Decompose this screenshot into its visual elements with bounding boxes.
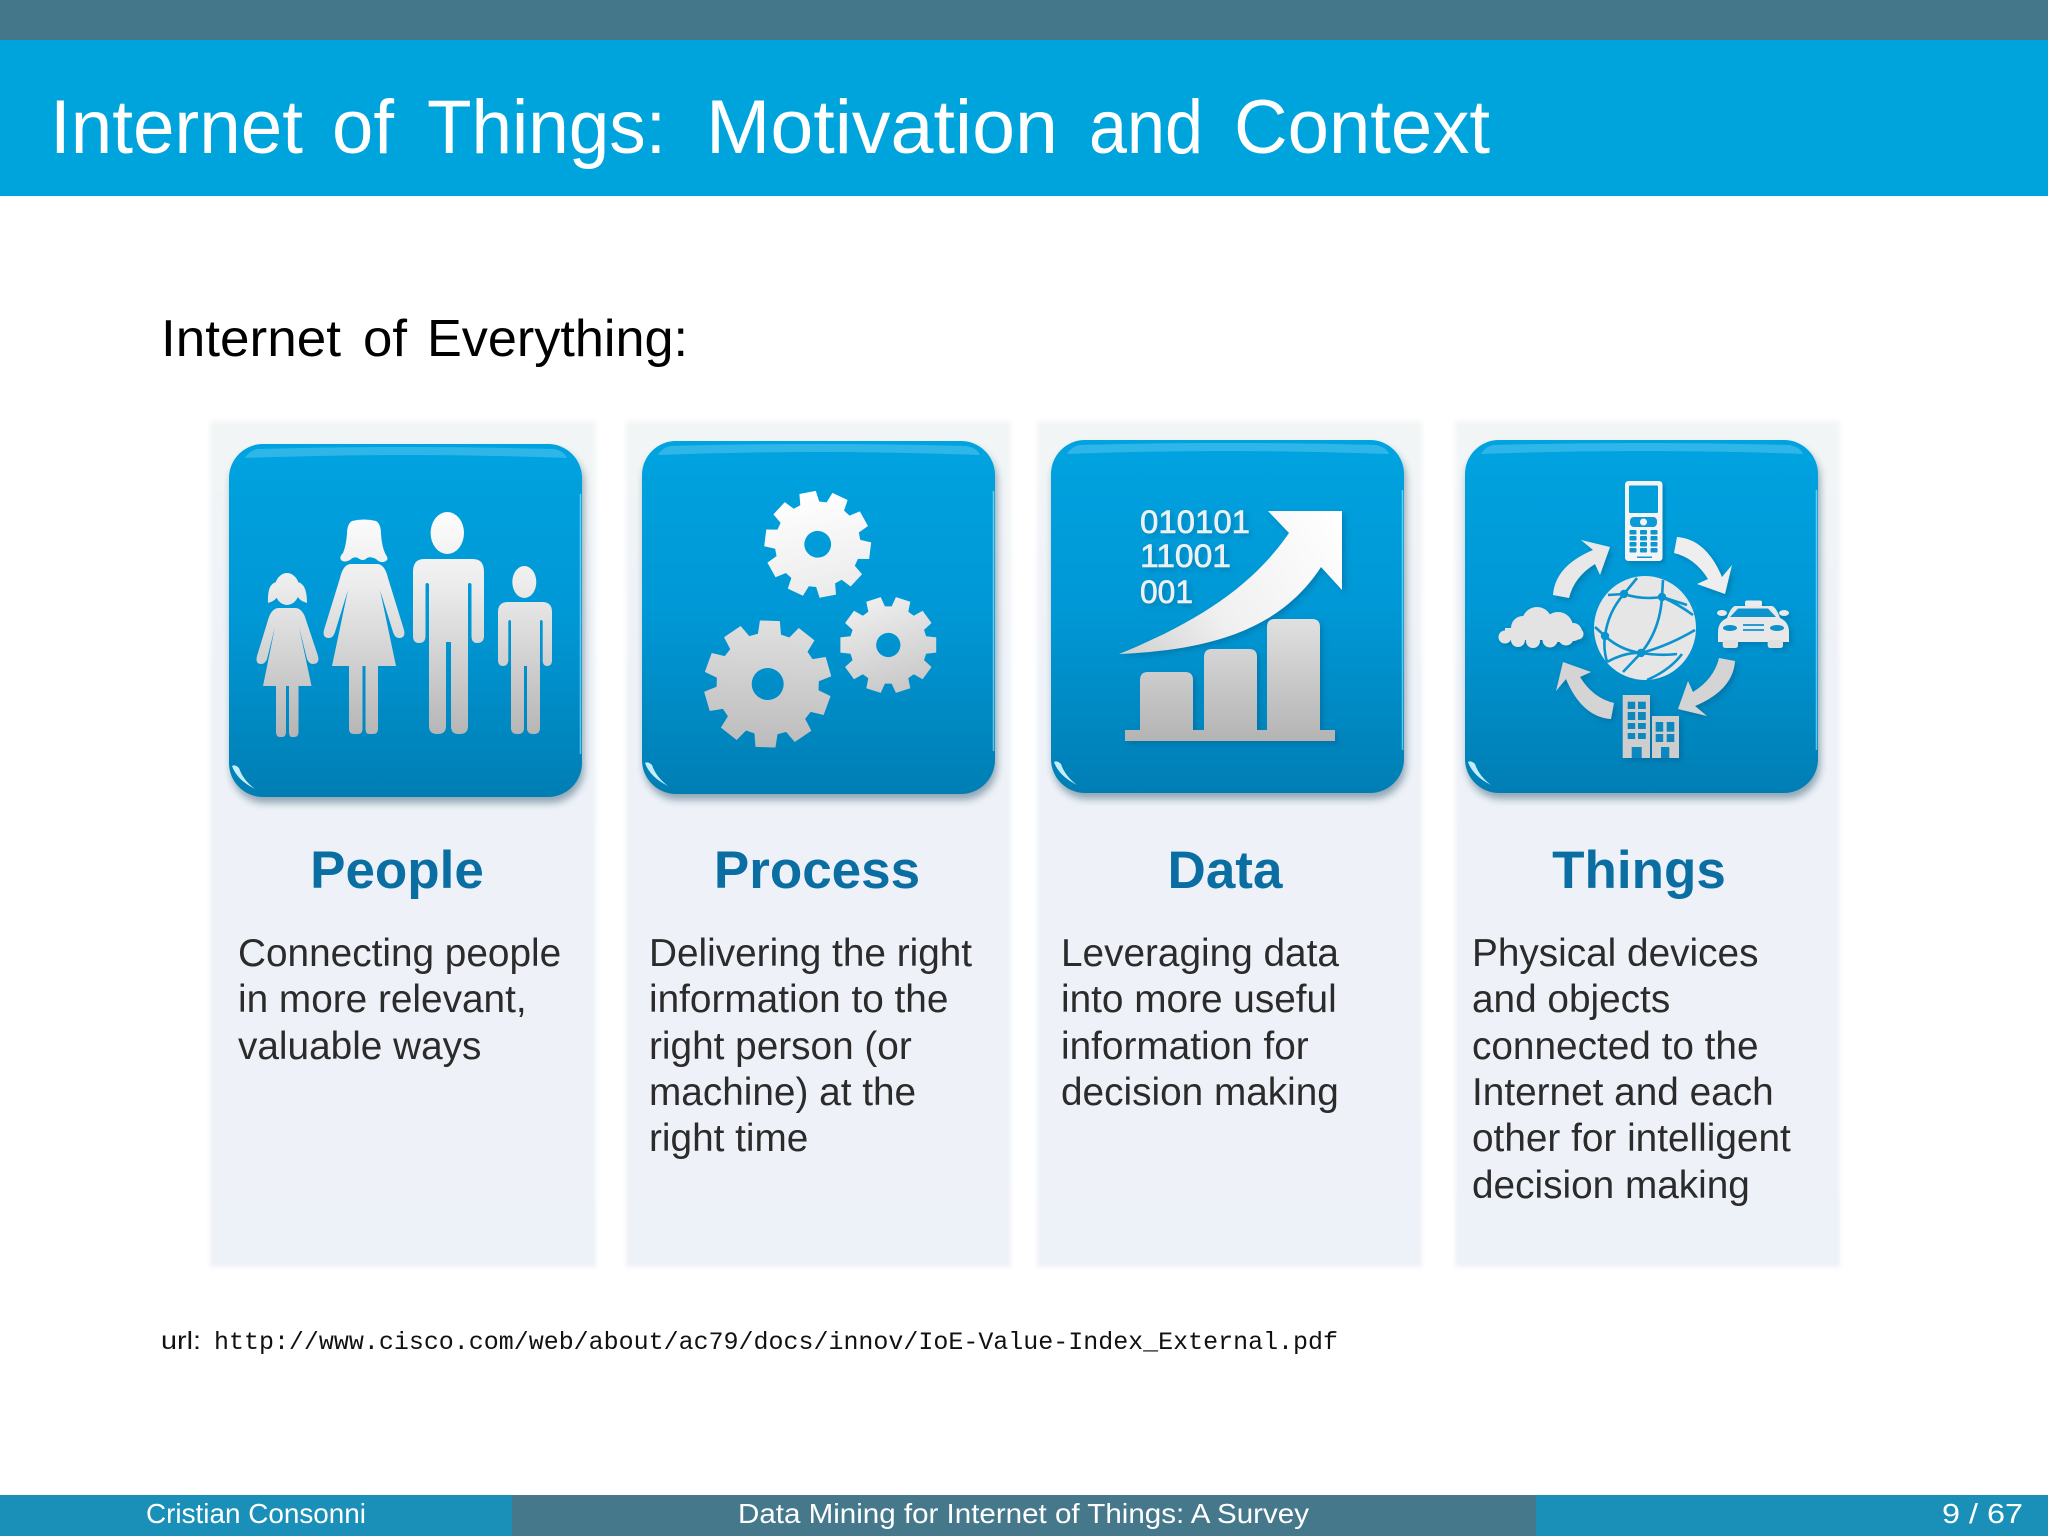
- text: process description: information to the: [649, 978, 948, 1021]
- text: people description: valuable ways: [238, 1025, 481, 1068]
- title: Things:: [427, 85, 666, 170]
- heading: data: Data: [1168, 841, 1283, 900]
- top strip: [0, 0, 2048, 40]
- text: things description: Internet and each: [1472, 1071, 1774, 1114]
- text: process description: Delivering the right: [649, 932, 972, 975]
- title: and: [1089, 85, 1203, 170]
- panel: things: [1455, 421, 1840, 1267]
- text: process description: right person (or: [649, 1025, 912, 1068]
- subtitle: of: [363, 310, 408, 368]
- icon: globe: [1594, 576, 1696, 680]
- text: things description: connected to the: [1472, 1025, 1759, 1068]
- icon: buildings: [1623, 695, 1679, 758]
- title: Motivation: [706, 85, 1058, 170]
- footer: talk title: Data Mining for Internet of Things: A Survey: [738, 1498, 1309, 1529]
- heading: people: People: [310, 841, 484, 900]
- heading: things: Things: [1552, 841, 1726, 900]
- subtitle: Everything:: [427, 310, 688, 368]
- heading: process: Process: [714, 841, 920, 900]
- text: people description: Connecting people: [238, 932, 561, 975]
- title: of: [332, 85, 395, 170]
- text: things description: decision making: [1472, 1164, 1750, 1207]
- text: data description: decision making: [1061, 1071, 1339, 1114]
- icon: bar chart: [1125, 619, 1335, 741]
- text: process description: right time: [649, 1117, 808, 1160]
- footer bar: [0, 1495, 2048, 1536]
- panel: people: [210, 421, 596, 1267]
- text: process description: machine) at the: [649, 1071, 916, 1114]
- icon: binary digits: [1140, 504, 1250, 610]
- icon: binary digits: 010101: [1140, 504, 1250, 540]
- text: data description: information for: [1061, 1025, 1309, 1068]
- source url: http://www.cisco.com/web/about/ac79/docs/innov/IoE-Value-Index_External.pdf: [214, 1328, 1338, 1357]
- icon: rising arrow: [1119, 511, 1342, 654]
- text: things description: Physical devices: [1472, 932, 1758, 975]
- text: people description: in more relevant,: [238, 978, 527, 1021]
- title: Internet: [50, 85, 303, 170]
- header bar: [0, 40, 2048, 196]
- text: things description: other for intelligent: [1472, 1117, 1791, 1160]
- footer: page number: 9 / 67: [1942, 1498, 2023, 1529]
- icon: binary digits: 11001: [1140, 538, 1231, 574]
- text: things description: and objects: [1472, 978, 1670, 1021]
- icon: gears: [702, 482, 949, 749]
- panel: data: [1037, 421, 1422, 1267]
- icon: binary digits: 001: [1140, 574, 1193, 610]
- icon: cloud: [1498, 607, 1584, 648]
- title: Context: [1234, 85, 1490, 170]
- icon: taxi: [1717, 600, 1789, 648]
- icon: family of four: [256, 512, 552, 737]
- subtitle: Internet: [161, 310, 342, 368]
- subtitle: [161, 310, 688, 368]
- text: data description: Leveraging data: [1061, 932, 1339, 975]
- icon: cycle arrows: [1553, 537, 1735, 719]
- title: [50, 85, 1490, 170]
- icon: mobile phone: [1625, 481, 1662, 561]
- panel: process: [626, 421, 1011, 1267]
- footer: author: Cristian Consonni: [146, 1498, 366, 1529]
- source url: url:: [161, 1327, 201, 1355]
- text: data description: into more useful: [1061, 978, 1337, 1021]
